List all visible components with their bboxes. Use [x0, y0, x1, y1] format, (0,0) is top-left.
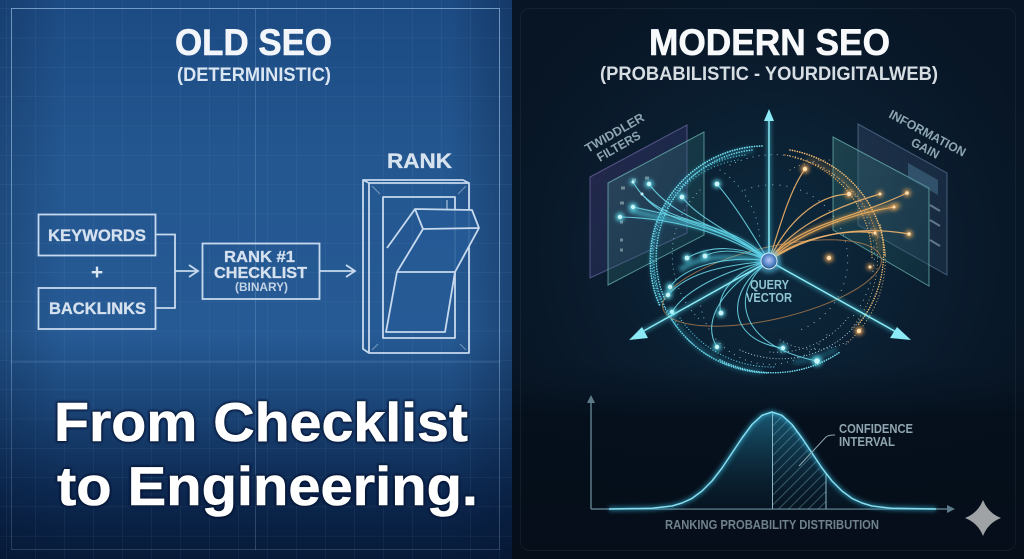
confidence interval hatch [772, 412, 826, 509]
label: query vector: QUERY [750, 277, 789, 292]
headline: from checklist to engineering: to Engineering. [57, 455, 478, 517]
panel: information gain: GAIN [909, 135, 942, 162]
box: keywords [38, 214, 156, 256]
plus sign: + [91, 261, 103, 284]
subheading: deterministic: (DETERMINISTIC) [177, 65, 331, 86]
diagram: query vector space [582, 107, 968, 373]
panel: twiddler filters: FILTERS [594, 128, 643, 165]
node: query vector origin [757, 249, 781, 273]
label: rank: RANK [387, 150, 452, 173]
fibres: cyan links [620, 182, 817, 361]
panel: twiddler filters: TWIDDLER [582, 110, 647, 156]
subheading: probabilistic: (PROBABILISTIC - YOURDIGITALWEB) [600, 64, 938, 85]
headline: from checklist to engineering: to Engineering. [57, 455, 478, 517]
area under bell curve [609, 412, 936, 509]
axes: three vector arrows [629, 109, 911, 340]
chart axes [587, 395, 955, 513]
bell curve line [609, 412, 936, 509]
box: backlinks [38, 288, 156, 329]
orbit line [655, 223, 889, 343]
box: rank #1 checklist [202, 244, 320, 299]
panel: twiddler filters [582, 110, 704, 285]
chart: ranking probability distribution [587, 395, 955, 532]
callout: confidence interval: INTERVAL [839, 435, 895, 449]
box: rank #1 checklist: CHECKLIST [214, 265, 307, 282]
sphere: dotted point cloud [650, 146, 885, 373]
label: query vector: VECTOR [746, 290, 793, 305]
interval bounds [772, 412, 826, 509]
panel: old SEO blueprint [0, 0, 512, 559]
box: backlinks: BACKLINKS [49, 299, 146, 318]
arrow: checklist to switch [320, 265, 355, 277]
headline: from checklist to engineering [54, 391, 478, 517]
heading: modern SEO: MODERN SEO [649, 22, 890, 63]
fibres: orange links [769, 169, 909, 261]
box: keywords: KEYWORDS [48, 226, 146, 245]
panel: modern SEO [512, 0, 1024, 559]
heading: OLD SEO: OLD SEO [175, 22, 332, 63]
label: query vector [746, 277, 793, 305]
icon: sparkle [965, 500, 1001, 536]
data points [616, 165, 912, 366]
callout: confidence interval: CONFIDENCE [839, 422, 913, 436]
panel: information gain [833, 107, 968, 286]
headline: from checklist to engineering: From Checklist [54, 391, 468, 453]
icon: rocker switch [363, 180, 479, 353]
arrow: inputs to checklist [156, 234, 198, 308]
panel: information gain: INFORMATION [887, 107, 968, 160]
headline: from checklist to engineering: From Checklist [54, 391, 468, 453]
glow: query fan [630, 205, 900, 270]
axis label: RANKING PROBABILITY DISTRIBUTION [665, 518, 879, 532]
box: rank #1 checklist: (BINARY) [235, 280, 288, 294]
box: rank #1 checklist: RANK #1 [224, 249, 295, 266]
callout: confidence interval [799, 422, 913, 466]
